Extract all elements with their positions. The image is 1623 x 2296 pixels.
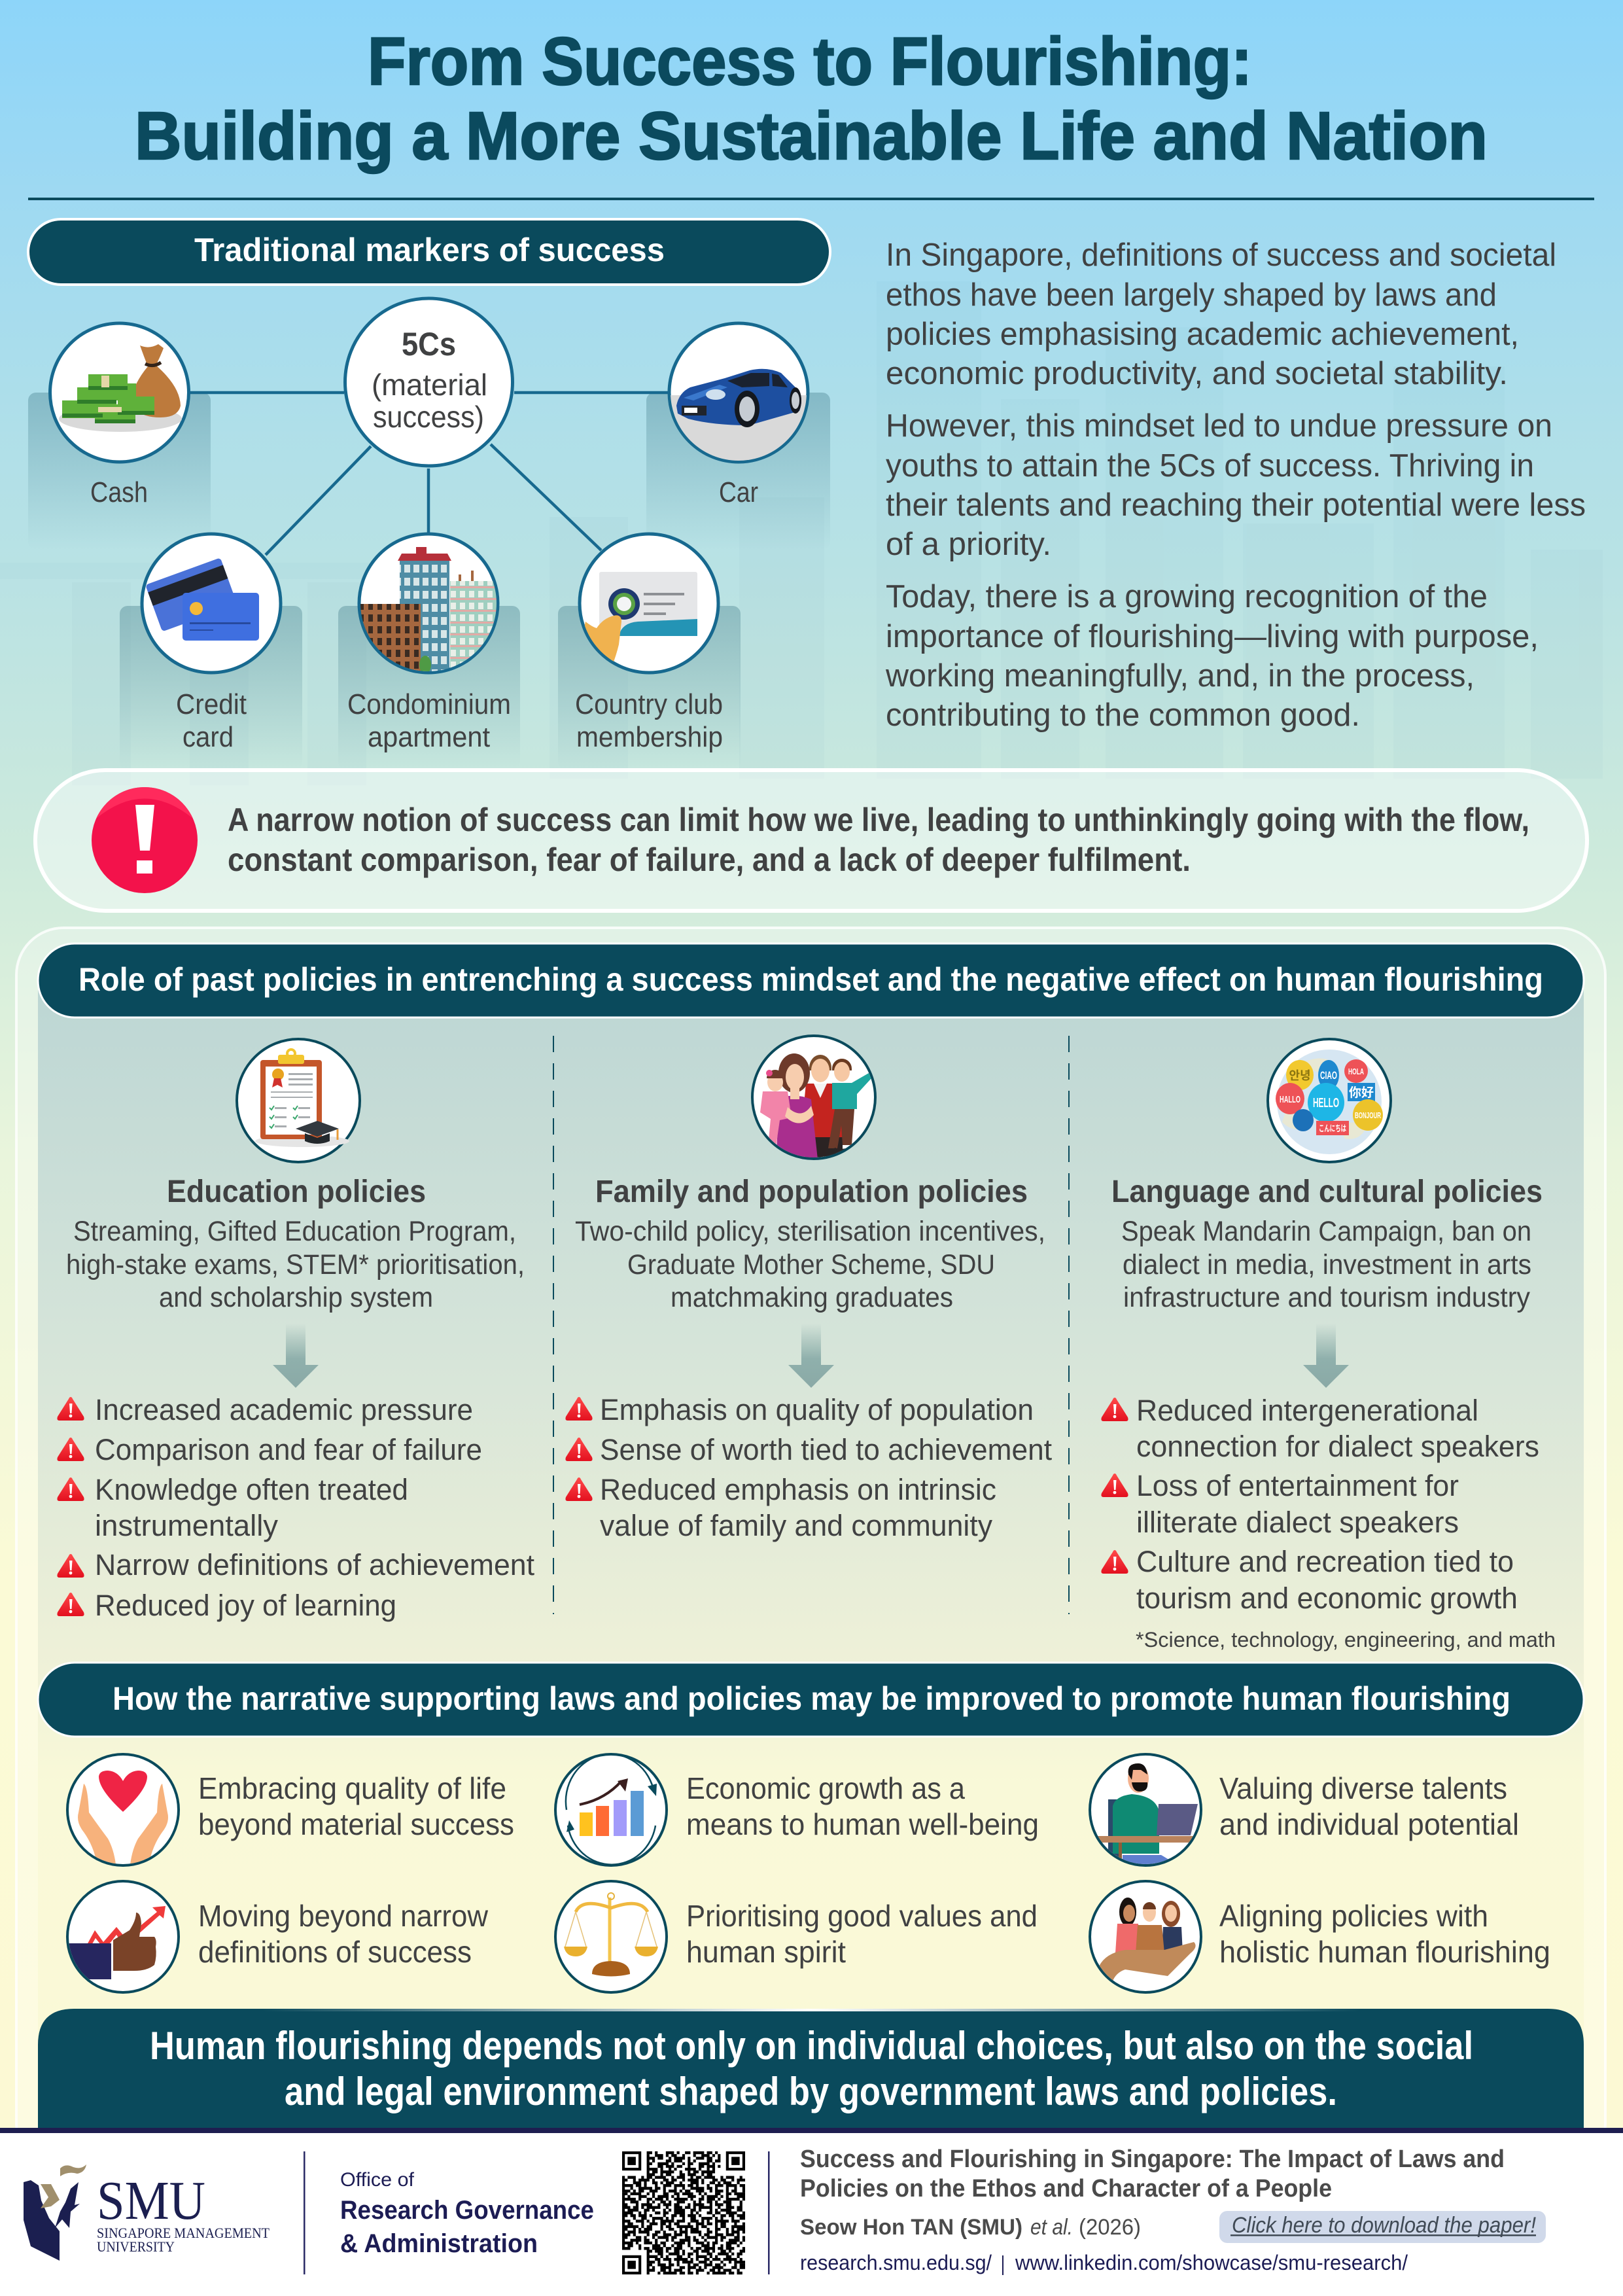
item: beyond narrow definitions: definitions of success (198, 1935, 472, 1969)
item: economic growth: means to human well-being (686, 1807, 1039, 1841)
icon: language bubbles: こんにちは (1319, 1123, 1346, 1133)
icon: language bubbles: CIAO (1320, 1069, 1337, 1082)
icon: hands and heart (67, 1754, 179, 1871)
icon: condominium (359, 534, 500, 676)
arrow (788, 1324, 834, 1388)
web links: www.linkedin.com/showcase/smu-research/ (1015, 2251, 1408, 2274)
icon: country club card (580, 534, 718, 674)
item: quality of life (67, 1754, 514, 1871)
icon: car (667, 323, 811, 467)
intro text block: Today, there is a growing recognition of the (886, 579, 1488, 614)
intro text block: economic productivity, and societal stability. (886, 356, 1508, 391)
bullets: Reduced intergenerational (1136, 1394, 1478, 1427)
column: family and population policies: matchmaking graduates (671, 1282, 953, 1313)
item: aligning policies (1090, 1881, 1550, 1992)
bullets: Reduced joy of learning (95, 1589, 396, 1622)
bullets: Culture and recreation tied to (1136, 1545, 1514, 1578)
column: language and cultural policies: dialect in media, investment in arts (1123, 1249, 1531, 1280)
arrow (273, 1324, 319, 1388)
labels: Car (719, 476, 758, 508)
column: education policies: Education policies (167, 1174, 426, 1209)
intro text block: contributing to the common good. (886, 698, 1360, 733)
bullets: Emphasis on quality of population (600, 1393, 1034, 1426)
heading pill (38, 1663, 1584, 1737)
column: family and population policies (565, 1036, 1052, 1542)
icon: thumbs up (62, 1881, 179, 1992)
conclusion banner: and legal environment shaped by government laws and policies. (285, 2070, 1337, 2113)
bullets (1101, 1394, 1539, 1615)
arrow (1303, 1324, 1349, 1388)
conclusion banner (38, 2009, 1584, 2128)
heading pill (38, 944, 1584, 1017)
paper citation: Policies on the Ethos and Character of a People (800, 2175, 1332, 2202)
office name: Office of (340, 2169, 415, 2191)
5Cs hub: 5Cs (402, 326, 456, 362)
SMU logo: SMU (97, 2170, 205, 2231)
panel: role of past policies (38, 944, 1584, 2128)
office name (340, 2169, 594, 2258)
heading pill: Traditional markers of success (194, 232, 665, 268)
heading pill (28, 219, 830, 285)
item: quality of life: beyond material success (198, 1807, 514, 1841)
icon: language bubbles: 你好 (1349, 1086, 1374, 1100)
column: education policies (57, 1039, 534, 1622)
bullets (57, 1393, 534, 1622)
column: language and cultural policies: Speak Mandarin Campaign, ban on (1121, 1216, 1531, 1247)
icon: credit cards (142, 534, 281, 673)
intro text block (885, 238, 1586, 733)
callout: narrow notion of success (35, 770, 1587, 911)
building backdrops (28, 393, 830, 769)
labels: Credit (176, 688, 247, 720)
conclusion banner: Human flourishing depends not only on individual choices, but also on the social (150, 2024, 1473, 2068)
icon: language bubbles: HELLO (1313, 1096, 1339, 1110)
paper citation: et al. (1030, 2215, 1073, 2240)
intro text block: policies emphasising academic achievement, (886, 317, 1519, 352)
item: good values (555, 1881, 1038, 1992)
office name: & Administration (340, 2229, 538, 2258)
title: From Success to Flourishing: (368, 24, 1252, 99)
bullets: instrumentally (95, 1509, 278, 1542)
bullets: connection for dialect speakers (1136, 1430, 1539, 1463)
web links: research.smu.edu.sg/ (800, 2251, 992, 2274)
heading pill: Role of past policies in entrenching a success mindset and the negative effect on human flourishing (79, 961, 1543, 998)
item: aligning policies: holistic human flourishing (1219, 1935, 1550, 1969)
column: education policies: Streaming, Gifted Education Program, (73, 1216, 516, 1247)
icon: language bubbles: HALLO (1280, 1094, 1300, 1105)
title (135, 24, 1488, 173)
bullets: illiterate dialect speakers (1136, 1506, 1459, 1539)
icon: people on hand (1090, 1881, 1201, 1992)
item: aligning policies: Aligning policies with (1219, 1899, 1488, 1933)
bullets: Loss of entertainment for (1136, 1469, 1459, 1502)
QR code (622, 2151, 745, 2274)
icon: clipboard (237, 1039, 360, 1162)
bullets: Comparison and fear of failure (95, 1433, 482, 1466)
icon: family (752, 1036, 875, 1163)
column: education policies: and scholarship system (159, 1282, 433, 1313)
download button: Click here to download the paper! (1232, 2213, 1537, 2238)
column: language and cultural policies: Language and cultural policies (1111, 1174, 1543, 1209)
item: good values: Prioritising good values and (686, 1899, 1038, 1933)
column: family and population policies: Two-child policy, sterilisation incentives, (575, 1216, 1045, 1247)
labels: Condominium (347, 688, 511, 720)
icon: scales (555, 1881, 667, 1992)
SMU logo (24, 2164, 270, 2261)
bullets: Narrow definitions of achievement (95, 1548, 534, 1581)
item: good values: human spirit (686, 1935, 846, 1969)
item: economic growth: Economic growth as a (686, 1771, 965, 1805)
icon: language bubbles (1268, 1039, 1391, 1162)
intro text block: ethos have been largely shaped by laws and (886, 277, 1497, 313)
footnote: *Science, technology, engineering, and math (1136, 1628, 1556, 1651)
paper citation: Success and Flourishing in Singapore: The Impact of Laws and (800, 2146, 1505, 2173)
5Cs hub: (material (372, 368, 487, 402)
column: language and cultural policies (1101, 1039, 1556, 1651)
intro text block: of a priority. (886, 527, 1051, 562)
bullets (565, 1393, 1052, 1542)
icon: language bubbles: 안녕 (1289, 1069, 1311, 1082)
item: beyond narrow definitions (62, 1881, 489, 1992)
bullets: Sense of worth tied to achievement (600, 1433, 1052, 1466)
item: diverse talents: Valuing diverse talents (1219, 1771, 1507, 1805)
skyline backdrop (0, 281, 1603, 785)
paper citation: Seow Hon TAN (SMU) (800, 2215, 1022, 2240)
paper citation (800, 2146, 1505, 2240)
web links (800, 2251, 1408, 2275)
icon: exclamation (92, 787, 198, 893)
bullets: tourism and economic growth (1136, 1581, 1518, 1615)
item: beyond narrow definitions: Moving beyond narrow (198, 1899, 489, 1933)
item: diverse talents: and individual potential (1219, 1807, 1519, 1841)
labels: Cash (90, 476, 148, 508)
column: family and population policies: Graduate Mother Scheme, SDU (627, 1249, 995, 1280)
labels: apartment (368, 721, 490, 753)
column: education policies: high-stake exams, STEM* prioritisation, (66, 1249, 525, 1280)
panel: outer frame (16, 928, 1605, 2171)
5Cs hub: success) (373, 400, 484, 434)
SMU logo: UNIVERSITY (97, 2238, 175, 2255)
panel: traditional markers of success (28, 219, 830, 769)
icon: language bubbles: HOLA (1348, 1067, 1364, 1076)
5Cs hub (345, 298, 513, 466)
title: Building a More Sustainable Life and Nation (135, 98, 1488, 173)
intro text block: their talents and reaching their potential were less (886, 487, 1586, 523)
bullets: value of family and community (600, 1509, 992, 1542)
bullets: Knowledge often treated (95, 1473, 408, 1506)
intro text block: In Singapore, definitions of success and societal (886, 238, 1556, 273)
item: diverse talents (1090, 1754, 1519, 1871)
callout: narrow notion of success: constant comparison, fear of failure, and a lack of deeper fulfilment. (228, 841, 1191, 878)
labels: Country club (575, 688, 723, 720)
intro text block: However, this mindset led to undue pressure on (886, 408, 1552, 444)
intro text block: importance of flourishing—living with purpose, (886, 619, 1539, 654)
bullets: Reduced emphasis on intrinsic (600, 1473, 996, 1506)
labels (90, 476, 758, 753)
item: economic growth (555, 1754, 1039, 1865)
icon: cash (50, 323, 188, 462)
footer (0, 2128, 1623, 2296)
SMU logo: SINGAPORE MANAGEMENT (97, 2225, 270, 2241)
connector lines (190, 393, 668, 555)
column: family and population policies: Family and population policies (595, 1174, 1028, 1209)
heading pill: How the narrative supporting laws and policies may be improved to promote human flourishing (113, 1680, 1510, 1717)
panel: how the narrative may be improved (38, 1663, 1584, 1992)
column: language and cultural policies: infrastructure and tourism industry (1123, 1282, 1530, 1313)
bullets: Increased academic pressure (95, 1393, 473, 1426)
office name: Research Governance (340, 2196, 594, 2225)
labels: membership (576, 721, 723, 753)
intro text block: youths to attain the 5Cs of success. Thriving in (886, 448, 1534, 484)
item: quality of life: Embracing quality of life (198, 1771, 506, 1805)
intro text block: working meaningfully, and, in the process, (885, 658, 1475, 694)
icon: growth chart (555, 1754, 667, 1865)
labels: card (183, 721, 234, 753)
icon: person at laptop (1090, 1754, 1201, 1871)
icon: language bubbles: BONJOUR (1355, 1110, 1381, 1120)
paper citation: (2026) (1079, 2215, 1141, 2240)
